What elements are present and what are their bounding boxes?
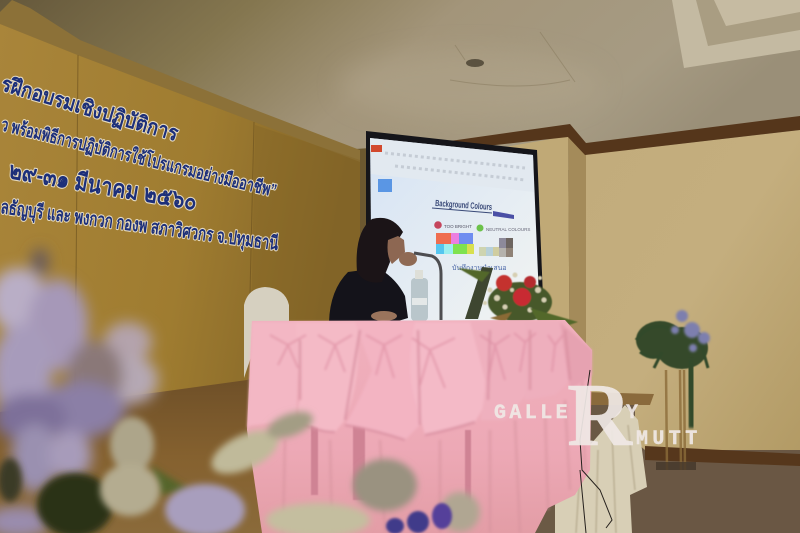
red X icon bbox=[434, 221, 442, 229]
watermark MUTT: MUTT bbox=[636, 428, 702, 451]
speaker hair bbox=[357, 218, 403, 283]
skirt pleats bbox=[283, 380, 585, 533]
pink table skirt bbox=[247, 320, 592, 533]
bow folds bbox=[270, 333, 563, 388]
skirt swags bbox=[247, 322, 592, 440]
banner line 3: ๒๙-๓๑ มีนาคม ๒๕๖๐ bbox=[7, 157, 199, 216]
projection screen bbox=[366, 131, 544, 322]
watermark GALLE: GALLE bbox=[494, 402, 571, 425]
speaker jacket bbox=[329, 268, 408, 322]
bright colour swatches bbox=[436, 233, 474, 254]
watermark Y: Y bbox=[626, 402, 638, 425]
slide title rule bbox=[432, 208, 492, 213]
title accent bbox=[493, 211, 514, 219]
white table cloth at right bbox=[555, 405, 647, 533]
dark purple blossoms at bottom bbox=[386, 503, 452, 533]
skirt dark pleat gaps bbox=[311, 420, 471, 515]
banner text: Thai lines bbox=[0, 73, 280, 256]
stand base bbox=[656, 462, 696, 470]
fern leaves bbox=[636, 321, 708, 369]
baseboard bbox=[645, 446, 800, 466]
foreground white flowers bbox=[100, 406, 480, 533]
watermark: Gallery RMUTT bbox=[494, 366, 702, 465]
ribbon details bbox=[385, 153, 525, 180]
laptop bbox=[465, 267, 493, 319]
right wall bbox=[583, 130, 800, 462]
neutral colour swatches bbox=[479, 238, 513, 257]
water bottle bbox=[411, 270, 428, 321]
speaker face bbox=[388, 236, 405, 264]
dark wall behind screen bbox=[340, 140, 490, 330]
banner line 4: ลธัญบุรี และ พงกวก กองพ สภาวิศวกร จ.ปทุมธานี bbox=[0, 196, 280, 256]
watermark large R: R bbox=[567, 366, 633, 465]
ceiling bbox=[0, 0, 800, 170]
speaker hand on table bbox=[371, 311, 397, 321]
ceiling spotlight bbox=[466, 59, 484, 67]
slide thumbnail bbox=[378, 179, 392, 192]
microphone bbox=[414, 253, 441, 320]
slide footer line: บันทึกงานนำเสนอ bbox=[452, 263, 507, 272]
hanging vine bbox=[689, 360, 693, 428]
banner curtain backdrop bbox=[0, 0, 360, 412]
foreground lavender flowers bbox=[0, 248, 158, 533]
wall column bbox=[488, 136, 586, 400]
speaker hand at microphone bbox=[399, 252, 417, 266]
banner line 2: ว พร้อมพิธีการปฏิบัติการใช้โปรแกรมอย่างมืออาชีพ” bbox=[0, 113, 279, 201]
banner line 1: รฝึกอบรมเชิงปฏิบัติการ bbox=[0, 73, 181, 146]
slide title: Background Colours bbox=[435, 198, 492, 212]
speaker bbox=[329, 218, 417, 322]
small side table bbox=[585, 392, 654, 445]
chair bbox=[244, 287, 289, 378]
swag edge shadows bbox=[296, 330, 570, 440]
green check icon bbox=[476, 224, 484, 232]
lower wall and floor left bbox=[0, 380, 300, 533]
plant stand bbox=[666, 370, 685, 470]
recessed ceiling panel bbox=[672, 0, 800, 68]
table flower arrangement bbox=[458, 268, 578, 333]
side carpet floor bbox=[600, 450, 800, 533]
dark green leaves bbox=[0, 458, 190, 533]
purple blossoms bbox=[671, 310, 710, 352]
cable bbox=[580, 370, 612, 533]
office red tab bbox=[371, 145, 382, 152]
slide ribbon toolbar bbox=[370, 138, 534, 192]
neutral colours label: NEUTRAL COLOURS bbox=[486, 227, 530, 232]
too bright label: TOO BRIGHT bbox=[444, 224, 472, 229]
potted plant on stand bbox=[636, 310, 710, 470]
wooden crown trim bbox=[450, 116, 800, 155]
